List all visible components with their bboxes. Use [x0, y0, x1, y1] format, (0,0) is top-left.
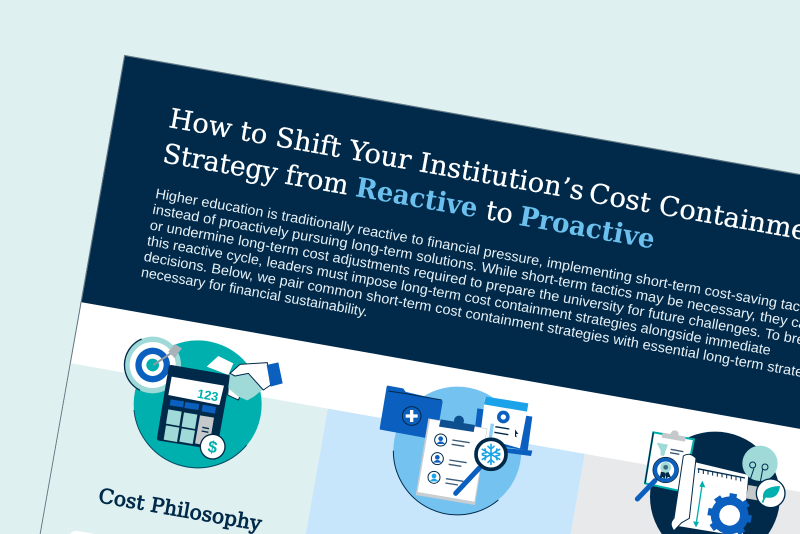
- intro paragraph: [140, 185, 800, 400]
- blueprint scroll: [671, 454, 748, 534]
- panel: cost philosophy column: [19, 363, 328, 534]
- blue disc: [393, 387, 521, 515]
- calculator: 123: [196, 387, 219, 404]
- icon: folder, clipboard and freeze magnifier: [381, 387, 532, 515]
- title: [160, 103, 800, 286]
- clipboard: [416, 416, 487, 505]
- title: Reactive: [353, 172, 480, 224]
- intro paragraph: this reactive cycle, leaders must impose long-term cost containment strategies alongside immediate: [146, 232, 772, 358]
- folder: [381, 387, 442, 439]
- coin: [200, 434, 225, 459]
- magnifier with snowflake: [456, 439, 506, 493]
- navy disc: [650, 432, 780, 534]
- icon: calculator with target and handshake: [124, 337, 283, 468]
- magnifier with award: [637, 457, 678, 499]
- intro paragraph: necessary for financial sustainability.: [140, 264, 369, 319]
- calculator: [159, 367, 228, 447]
- paper behind calculator: [207, 356, 233, 375]
- panel: second column: [276, 409, 585, 534]
- gear: [704, 490, 755, 534]
- title: Strategy from: [160, 138, 351, 202]
- header band: [82, 56, 800, 439]
- intro paragraph: Higher education is traditionally reactive to financial pressure, implementing short-term cost-saving tactics: [154, 185, 800, 318]
- laptop: [473, 397, 532, 456]
- intro paragraph: or undermine long-term cost adjustments required to prepare the university for future challenges. To break: [149, 217, 800, 351]
- title: How to Shift Your Institution’s: [167, 103, 587, 207]
- card: cost philosophy: [49, 530, 272, 534]
- panel: third column: [533, 454, 800, 534]
- icon: blueprint, gear and light bulb: [637, 430, 785, 534]
- title: Proactive: [517, 201, 657, 256]
- teal disc: [134, 340, 262, 468]
- handshake: [228, 362, 283, 400]
- intro paragraph: decisions. Below, we pair common short-term cost containment strategies with essential long-term strategies: [143, 248, 800, 385]
- intro paragraph: instead of proactively pursuing long-term solutions. While short-term tactics may be necessary, they can: [152, 201, 800, 333]
- leaf badge: [756, 479, 785, 508]
- title: to: [483, 195, 515, 231]
- coin: $: [206, 437, 220, 457]
- heading: cost philosophy: Cost Philosophy: [97, 483, 264, 534]
- target: [124, 337, 182, 393]
- light bulb: [742, 446, 778, 501]
- certificate clipboard: [645, 430, 694, 492]
